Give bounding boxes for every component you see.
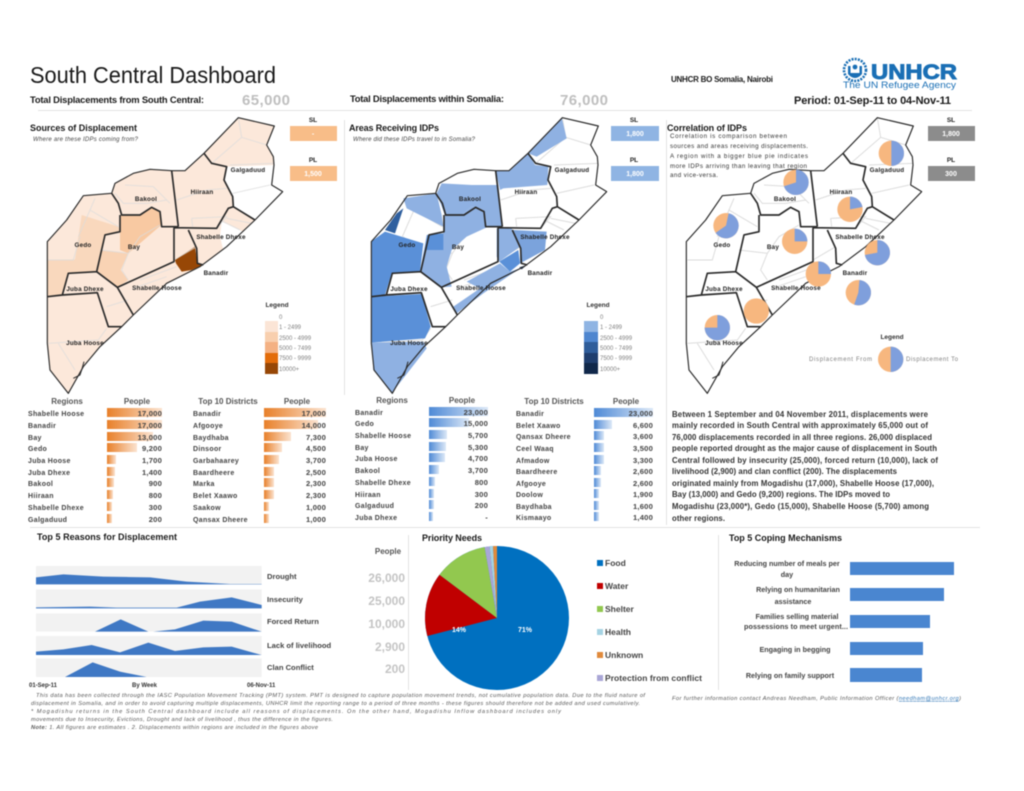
legend: sources: 10000+	[279, 367, 300, 373]
table: source regions: Gedo	[28, 446, 47, 453]
PL indicator: sources: 1,500	[304, 171, 322, 178]
explanation: correlation	[670, 133, 808, 179]
table: receiving regions: Juba Dhexe	[355, 515, 397, 522]
table: source regions: 13,000	[138, 433, 162, 442]
table: source regions: 17,000	[138, 421, 162, 430]
table: receiving districts: 2,600	[633, 467, 653, 476]
map: receiving choropleth: Banadir	[528, 270, 553, 277]
map: receiving choropleth	[371, 118, 607, 393]
pie chart: priority needs	[425, 546, 569, 690]
map: receiving choropleth: Bakool	[459, 196, 481, 203]
bar chart: coping mechanisms: Relying on humanitarian	[756, 585, 840, 594]
bar chart: coping mechanisms: Relying on family support	[746, 671, 835, 680]
table: source districts: 2,300	[306, 491, 326, 500]
table: source districts: 2,300	[306, 479, 326, 488]
PL indicator: correlation	[928, 157, 975, 181]
SI indicator: receiving: 1,800	[626, 131, 644, 138]
values: people per reason: 26,000	[368, 571, 405, 585]
explanation: correlation: and vice-versa.	[670, 172, 718, 179]
footnotes: * Mogadishu returns in the South Central dashboard include all reasons of displacements. On the other hand, Mogadishu Inflow dashboard includes only	[31, 709, 562, 715]
SI indicator: correlation: SL	[947, 117, 955, 124]
legend: sources: 2500 - 4999	[279, 336, 312, 342]
table: source districts: Garbahaarey	[193, 458, 239, 465]
map: correlation pies: Shabelle Dhexe	[835, 234, 885, 241]
map: sources choropleth: Shabelle Hoose	[132, 285, 182, 292]
explanation: correlation: A region with a bigger blue pie indicates	[670, 153, 808, 160]
legend: receiving: 7500 - 9999	[600, 356, 633, 362]
pie chart: priority needs: 71%	[518, 627, 533, 634]
bar chart: coping mechanisms	[734, 559, 954, 682]
table: receiving districts: Qansax Dheere	[516, 434, 571, 441]
map: correlation pies: Galgaduud	[870, 167, 904, 174]
map: correlation pies: Bay	[767, 244, 779, 251]
chart: weekly area sparklines: Drought	[267, 572, 297, 581]
table: receiving districts: Ceel Waaq	[516, 446, 554, 453]
pie: Shabelle Hoose	[806, 261, 831, 287]
table: source regions: Shabelle Dhexe	[28, 505, 84, 512]
chart: weekly area sparklines: Clan Conflict	[267, 663, 314, 672]
table: receiving districts: Afmadow	[516, 458, 550, 465]
table: receiving districts: People	[613, 397, 640, 406]
PL indicator: receiving: 1,800	[626, 171, 644, 178]
table: source districts: Saakow	[193, 505, 221, 512]
map: correlation pies	[686, 118, 922, 393]
table: source regions: Banadir	[28, 423, 56, 430]
SI indicator: correlation	[928, 117, 975, 141]
bar chart: coping mechanisms: Families selling material	[755, 612, 839, 621]
panel: areas receiving IDPs	[349, 117, 659, 393]
map: sources choropleth: Bakool	[135, 196, 157, 203]
table: receiving regions: 800	[475, 478, 488, 487]
map: receiving choropleth: Juba Hoose	[390, 340, 428, 347]
table: receiving regions: Bakool	[355, 468, 380, 475]
map: receiving choropleth: Juba Dhexe	[390, 286, 428, 293]
table: receiving districts: 1,400	[633, 513, 653, 522]
bar chart: coping mechanisms: Engaging in begging	[759, 645, 831, 654]
pie chart: priority needs: 14%	[452, 627, 467, 634]
chart: weekly area sparklines: Forced Return	[267, 617, 319, 626]
chart: weekly area sparklines: 06-Nov-11	[247, 683, 276, 689]
table: receiving districts: 3,500	[633, 444, 653, 453]
table: receiving districts: 1,900	[633, 490, 653, 499]
panel: top 5 coping mechanisms	[729, 533, 954, 682]
legend: priority needs: Protection from conflict	[605, 673, 702, 683]
map: correlation pies: Shabelle Hoose	[771, 285, 821, 292]
header: total displacements within Somalia: 76,000	[560, 92, 608, 109]
legend: priority needs: Food	[605, 558, 626, 568]
chart: weekly area sparklines: Insecurity	[267, 595, 304, 604]
table: receiving districts: Baydhaba	[516, 504, 552, 511]
map: correlation pies: Hiiraan	[830, 189, 852, 196]
legend: sources: 0	[279, 315, 283, 321]
legend: priority needs: Water	[605, 581, 629, 591]
text block: summary narrative: mainly recorded in South Central with approximately 65,000 out of	[672, 421, 928, 430]
map: receiving choropleth: Galgaduud	[555, 167, 589, 174]
table: source districts: Qansax Dheere	[193, 517, 248, 524]
subheading: receiving: Where did these IDPs travel to in Somalia?	[353, 137, 476, 143]
table: receiving regions: 5,300	[468, 443, 488, 452]
icon: UNHCR logo: The UN Refugee Agency	[843, 80, 956, 91]
table: receiving districts: 3,300	[633, 456, 653, 465]
table: receiving regions: Shabelle Dhexe	[355, 480, 411, 487]
text block: summary narrative: Bay (13,000) and Gedo (9,200) regions. The IDPs moved to	[672, 490, 890, 499]
heading: reasons: Top 5 Reasons for Displacement	[37, 532, 177, 542]
table: receiving regions: Hiiraan	[355, 492, 381, 499]
map: receiving choropleth: Bay	[452, 244, 464, 251]
table: source districts: Baardheere	[193, 470, 235, 477]
table: receiving districts: Belet Xaawo	[516, 423, 561, 430]
heading: receiving: Areas Receiving IDPs	[349, 123, 439, 133]
table: source regions: Shabelle Hoose	[28, 411, 84, 418]
table: source districts: Dinsoor	[193, 446, 222, 453]
table: source districts: People	[284, 397, 311, 406]
legend: priority needs: Unknown	[605, 650, 643, 660]
bar chart: coping mechanisms: possessions to meet urgent...	[744, 622, 848, 631]
table: receiving districts: 1,600	[633, 502, 653, 511]
table: source regions: Juba Hoose	[28, 458, 71, 465]
PL indicator: sources: PL	[309, 157, 317, 164]
table: receiving regions: Galgaduud	[355, 503, 394, 510]
pie: Galgaduud	[879, 141, 904, 166]
map: sources choropleth: Gedo	[75, 242, 91, 249]
table: receiving districts: Kismaayo	[516, 515, 551, 522]
pie: Bay	[782, 229, 807, 254]
header: total displacements from South Central: 65,000	[242, 92, 290, 109]
table: source districts: 2,500	[306, 468, 326, 477]
table: receiving regions: Juba Hoose	[355, 456, 398, 463]
SI indicator: receiving	[611, 117, 659, 141]
pie: Hiiraan	[837, 197, 863, 222]
legend: correlation: Displacement To	[906, 357, 959, 363]
table: source regions: Regions	[51, 397, 83, 406]
table: source regions: 200	[149, 515, 162, 524]
values: people per reason: 25,000	[368, 594, 405, 608]
pie: Banadir	[846, 280, 871, 305]
table: receiving regions: 15,000	[464, 419, 488, 428]
legend: correlation	[809, 334, 959, 363]
table: receiving regions: 5,700	[468, 431, 488, 440]
table: source districts: Top 10 Districts	[198, 397, 258, 406]
pie: legend sample	[878, 347, 903, 372]
map: sources choropleth: Banadir	[204, 270, 229, 277]
contact line: For further information contact Andreas Needham, Public Information Officer (needham@unhcr.org)	[672, 696, 961, 702]
map: sources choropleth: Hiiraan	[191, 189, 213, 196]
footnotes: This data has been collected through the IASC Population Movement Tracking (PMT) system. PMT is designed to capture population movement trends, not cumulative population data. Due to the fluid nature of	[36, 693, 646, 699]
SI indicator: receiving: SL	[630, 117, 638, 124]
chart: weekly area sparklines: By Week	[132, 683, 158, 689]
legend: receiving: 5000 - 7499	[600, 346, 633, 352]
PL indicator: sources	[290, 157, 337, 181]
legend: correlation: Displacement From	[809, 357, 872, 363]
header: total displacements from South Central	[30, 92, 290, 109]
table: source regions: Galgaduud	[28, 517, 67, 524]
table: receiving districts: Afgooye	[516, 481, 546, 488]
map: correlation pies: Juba Hoose	[705, 340, 743, 347]
map: sources choropleth: Galgaduud	[231, 167, 265, 174]
bar chart: coping mechanisms: day	[781, 570, 793, 579]
heading: sources: Sources of Displacement	[30, 123, 137, 133]
table: source regions: Bakool	[28, 481, 53, 488]
SI indicator: sources	[290, 117, 337, 141]
legend: receiving	[584, 302, 633, 374]
footnotes: movements due to Insecurity, Evictions, Drought and lack of livelihood , thus the difference in the figures.	[31, 717, 333, 723]
table: receiving regions: Gedo	[355, 421, 374, 428]
explanation: correlation: sources and areas receiving displacements.	[670, 143, 808, 150]
values: people per reason: 10,000	[368, 617, 405, 631]
text block: summary narrative: 76,000 displacements recorded in all three regions. 26,000 displaced	[672, 433, 932, 442]
table: receiving regions: Bay	[355, 445, 369, 452]
icon: UNHCR logo: UNHCR	[871, 61, 957, 84]
footnotes	[31, 693, 646, 731]
text block: summary narrative: Mogadishu (23,000*), Gedo (15,000), Shabelle Hoose (5,700) among	[672, 502, 929, 511]
pie: Bakool	[783, 170, 809, 195]
pie: Shabelle Dhexe	[865, 240, 890, 265]
table: source regions: 1,700	[142, 456, 162, 465]
table: receiving districts: Doolow	[516, 492, 543, 499]
table: source districts: 1,000	[306, 503, 326, 512]
table: receiving regions: 200	[475, 501, 488, 510]
table: source districts: 4,500	[306, 444, 326, 453]
bar chart: coping mechanisms: assistance	[775, 597, 811, 606]
table: source districts: Marka	[193, 481, 215, 488]
values: people per reason	[368, 547, 405, 676]
map: sources choropleth: Bay	[128, 244, 140, 251]
panel: top 5 reasons for displacement	[29, 532, 405, 689]
table: receiving regions: Shabelle Hoose	[355, 433, 411, 440]
header: total displacements within Somalia: Total Displacements within Somalia:	[350, 93, 504, 104]
table: receiving regions: -	[485, 513, 488, 522]
map: receiving choropleth: Shabelle Hoose	[456, 285, 506, 292]
map: sources choropleth	[47, 118, 283, 393]
footnotes: Note: 1. All figures are estimates . 2. Displacements within regions are included in the figures above	[31, 725, 318, 731]
table: source districts: Banadir	[193, 411, 221, 418]
table: receiving regions: Regions	[376, 396, 408, 405]
legend: receiving: 0	[600, 315, 604, 321]
legend: receiving: 2500 - 4999	[600, 336, 633, 342]
legend: priority needs	[597, 558, 702, 683]
SI indicator: sources: -	[312, 131, 315, 138]
table: source regions: 800	[149, 491, 162, 500]
SI indicator: sources: SL	[309, 117, 317, 124]
map: correlation pies: Juba Dhexe	[705, 286, 743, 293]
map: sources choropleth: Shabelle Dhexe	[196, 234, 246, 241]
table: receiving districts: 2,600	[633, 479, 653, 488]
values: people per reason: 200	[385, 662, 405, 676]
table: receiving districts: 6,600	[633, 421, 653, 430]
table: source regions	[28, 397, 162, 524]
table: source regions: Hiiraan	[28, 493, 54, 500]
values: people per reason: People	[375, 547, 402, 556]
table: source regions: 17,000	[138, 409, 162, 418]
table: receiving regions: 23,000	[464, 408, 488, 417]
text block: summary narrative: other regions.	[672, 514, 725, 523]
table: source regions: 9,200	[142, 444, 162, 453]
bar chart: coping mechanisms: Reducing number of meals per	[734, 559, 840, 568]
legend: sources	[265, 302, 312, 374]
table: source regions: Juba Dhexe	[28, 470, 70, 477]
table: receiving regions: 3,700	[468, 466, 488, 475]
table: source districts: 17,000	[302, 409, 326, 418]
text block: summary narrative: people reported drought as the major cause of displacement in South	[672, 444, 937, 453]
table: receiving regions: People	[449, 396, 476, 405]
map: sources choropleth: Juba Hoose	[66, 340, 104, 347]
table: receiving districts: 23,000	[629, 409, 653, 418]
legend: priority needs: Shelter	[605, 604, 635, 614]
PL indicator: receiving	[611, 157, 659, 181]
table: source regions: 300	[149, 503, 162, 512]
chart: weekly area sparklines	[29, 566, 331, 689]
pie: Juba Dhexe	[744, 298, 769, 324]
text block: summary narrative: Central followed by insecurity (25,000), forced return (10,000), lack of	[672, 456, 938, 465]
heading: coping: Top 5 Coping Mechanisms	[729, 533, 842, 543]
heading: priority needs: Priority Needs	[422, 533, 482, 543]
legend: sources: 5000 - 7499	[279, 346, 312, 352]
map: sources choropleth: Juba Dhexe	[66, 286, 104, 293]
heading: correlation: Correlation of IDPs	[667, 123, 747, 133]
explanation: correlation: more IDPs arriving than leaving that region	[670, 163, 808, 170]
table: source regions: Bay	[28, 435, 42, 442]
title: South Central Dashboard	[30, 62, 276, 88]
office name: UNHCR BO Somalia, Nairobi	[671, 75, 773, 84]
SI indicator: correlation: 1,800	[942, 131, 960, 138]
legend: sources: Legend	[265, 302, 289, 309]
explanation: correlation: Correlation is comparison between	[670, 133, 788, 140]
table: receiving regions: Banadir	[355, 410, 383, 417]
legend: priority needs: Health	[605, 627, 631, 637]
legend: correlation: Legend	[880, 334, 904, 341]
table: receiving districts	[516, 397, 653, 522]
header: total displacements from South Central: Total Displacements from South Central:	[30, 94, 204, 105]
map: receiving choropleth: Shabelle Dhexe	[520, 234, 570, 241]
table: receiving districts: Banadir	[516, 411, 544, 418]
text block: summary narrative: livelihood (2,900) and clan conflict (200). The displacements	[672, 467, 898, 476]
icon: UNHCR logo	[843, 59, 957, 91]
map: receiving choropleth: Hiiraan	[515, 189, 537, 196]
table: receiving regions: 4,700	[468, 454, 488, 463]
table: receiving districts: Top 10 Districts	[524, 397, 584, 406]
legend: receiving: Legend	[586, 302, 610, 309]
panel: correlation of IDPs	[667, 117, 975, 393]
table: source regions: 1,400	[142, 468, 162, 477]
table: source districts: 14,000	[302, 421, 326, 430]
header: total displacements within Somalia	[350, 92, 608, 109]
map: receiving choropleth: Gedo	[399, 242, 415, 249]
PL indicator: correlation: 300	[945, 171, 957, 178]
text block: summary narrative	[672, 410, 938, 523]
text block: summary narrative: Between 1 September and 04 November 2011, displacements were	[672, 410, 929, 419]
text block: summary narrative: originated mainly from Mogadishu (17,000), Shabelle Hoose (17,000),	[672, 479, 934, 488]
chart: weekly area sparklines: 01-Sep-11	[29, 683, 58, 689]
values: people per reason: 2,900	[375, 640, 405, 654]
table: receiving districts: Baardheere	[516, 469, 558, 476]
period: Period: 01-Sep-11 to 04-Nov-11	[794, 95, 951, 107]
table: source districts: Belet Xaawo	[193, 493, 238, 500]
table: source districts: Afgooye	[193, 423, 223, 430]
table: source districts: 3,700	[306, 456, 326, 465]
legend: sources: 1 - 2499	[279, 325, 302, 331]
pie: Juba Hoose	[705, 315, 730, 340]
map: correlation pies: Gedo	[714, 242, 730, 249]
legend: receiving: 10000+	[600, 367, 621, 373]
legend: receiving: 1 - 2499	[600, 325, 623, 331]
panel: sources of displacement	[30, 117, 337, 393]
panel: priority needs	[422, 533, 702, 690]
table: source regions: 900	[149, 479, 162, 488]
map: correlation pies: Banadir	[843, 270, 868, 277]
subheading: sources: Where are these IDPs coming from?	[33, 137, 139, 143]
table: source districts: Baydhaba	[193, 435, 229, 442]
map: correlation pies: Bakool	[774, 196, 796, 203]
table: source districts: 7,300	[306, 433, 326, 442]
chart: weekly area sparklines: Lack of livelihood	[267, 641, 331, 650]
legend: sources: 7500 - 9999	[279, 356, 312, 362]
footnotes: displacement in Somalia, and in order to avoid capturing multiple displacements, UNHCR limit the reporting range to a period of three months - these figures should therefore not be added and used cumulatively.	[31, 701, 640, 707]
table: source districts	[193, 397, 326, 524]
PL indicator: correlation: PL	[947, 157, 955, 164]
table: receiving regions	[355, 396, 488, 522]
PL indicator: receiving: PL	[630, 157, 638, 164]
table: source regions: People	[124, 397, 151, 406]
table: receiving regions: 300	[475, 490, 488, 499]
table: receiving districts: 3,600	[633, 432, 653, 441]
pie: Gedo	[713, 213, 739, 238]
table: source districts: 1,000	[306, 515, 326, 524]
